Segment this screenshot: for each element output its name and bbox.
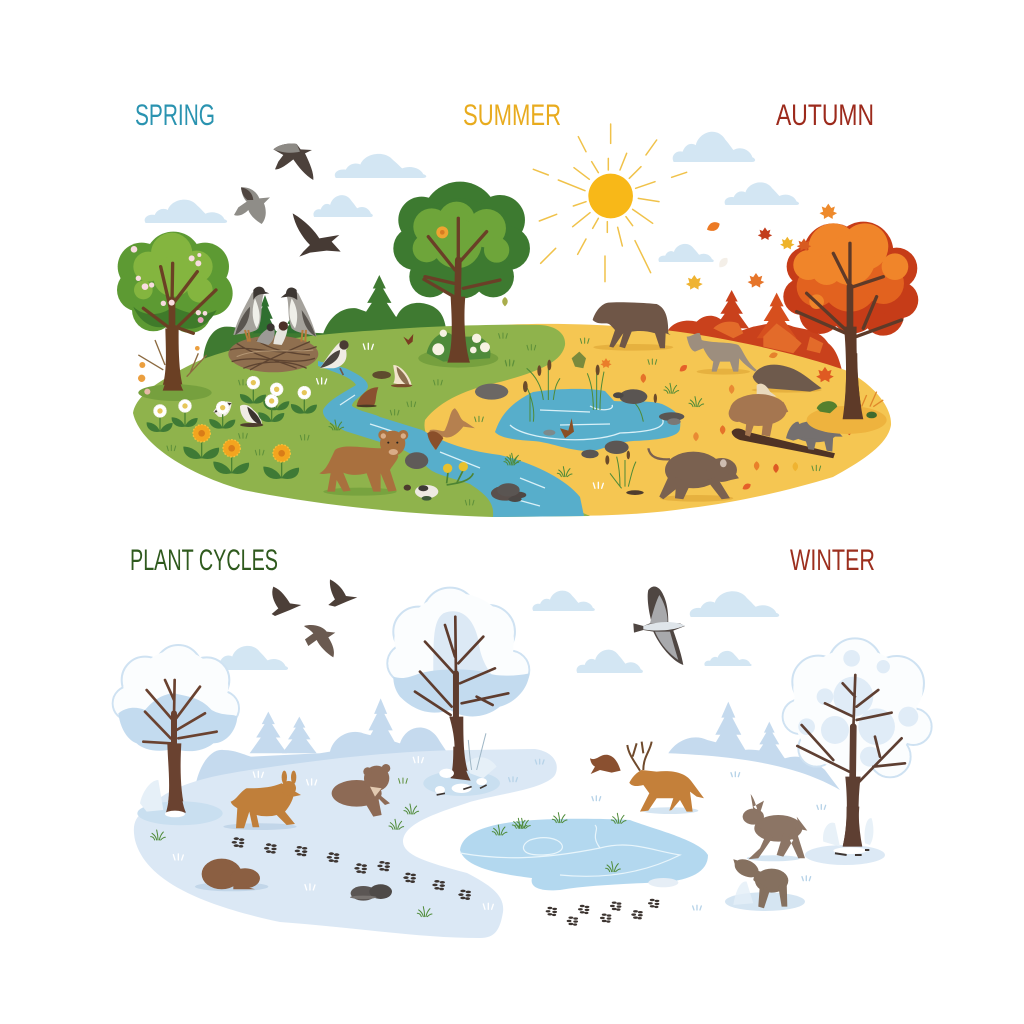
falling leaves — [600, 204, 852, 491]
bottom boar — [648, 448, 739, 502]
winter mid tree inner fill — [388, 593, 528, 707]
dog — [319, 430, 408, 496]
autumn tree trunk — [797, 243, 902, 419]
summer tree canopy — [393, 182, 530, 298]
winter mid tree snow base — [423, 747, 500, 796]
title: Plant cycles: PLANT CYCLES — [130, 544, 278, 577]
panel: spring scene — [117, 144, 530, 505]
groundhog — [195, 859, 268, 891]
summer tree trunk — [424, 218, 500, 363]
winter birds trio — [272, 579, 357, 657]
boar top — [593, 302, 673, 351]
tufts winter right — [509, 759, 826, 910]
river ripples — [340, 395, 545, 506]
rocks winter — [350, 884, 392, 901]
adult bird right — [281, 288, 317, 342]
panel: summer and autumn scene — [497, 124, 918, 502]
perched bird pair — [372, 365, 412, 387]
spring tree blossoms — [131, 246, 207, 323]
cattails and reeds — [525, 365, 643, 488]
summer tree light foliage — [413, 202, 509, 268]
winter tree left blue shading — [118, 693, 237, 751]
small fox — [590, 755, 621, 774]
winter right tree trunk — [797, 675, 905, 847]
winter tree left trunk — [143, 680, 217, 813]
grey deer — [743, 794, 807, 861]
title: Spring: SPRING — [135, 99, 215, 132]
winter tree left canopy outline — [113, 645, 239, 726]
mushrooms and bush by autumn tree — [807, 392, 887, 434]
winter mid tree trunk — [415, 617, 508, 780]
rocks and stones by river — [404, 384, 526, 501]
winter right tree inner fill — [784, 648, 931, 776]
spring tree light foliage — [133, 233, 213, 303]
summer tree flower and leaf — [436, 226, 508, 306]
winter right tree snow base — [805, 807, 885, 865]
autumn tree bright foliage — [793, 223, 908, 309]
butterfly on pond — [560, 418, 574, 438]
butterfly on bank — [572, 352, 586, 368]
autumn tree mid foliage — [797, 255, 904, 312]
panel: autumn forest hills — [667, 290, 845, 383]
winter mid tree blue shading — [393, 669, 529, 716]
pond — [495, 389, 680, 451]
spring tree dark lower foliage — [133, 307, 217, 329]
snow mound by pond — [648, 878, 678, 887]
panel: winter scene right — [509, 586, 932, 926]
nest — [228, 336, 318, 372]
adult bird left — [233, 287, 269, 342]
clouds: lower sky — [211, 591, 779, 673]
bird: top — [273, 144, 313, 180]
panel: spring forest hills — [203, 275, 447, 367]
winter tree left snow mound — [137, 767, 223, 825]
pond ripples — [510, 405, 663, 440]
standing bird by river — [320, 340, 349, 375]
mole — [752, 365, 822, 393]
cattail heads — [523, 360, 657, 465]
wolf — [725, 856, 805, 911]
spring small orange blooms — [138, 346, 200, 395]
grass clumps — [505, 338, 821, 488]
grass winter left — [151, 757, 493, 909]
spring tree base shadow — [138, 360, 212, 401]
grass sprigs — [389, 804, 530, 917]
paw prints below pond — [546, 899, 659, 926]
yellow flowers by river — [443, 462, 473, 485]
panel: winter hills left — [195, 698, 450, 788]
chicks — [257, 321, 288, 345]
bird: grey — [234, 187, 270, 224]
fallen log — [732, 428, 835, 458]
duck-like animal on bank — [427, 408, 475, 450]
winter mid tree pale centre — [433, 611, 497, 680]
butterfly — [403, 334, 413, 345]
spring tree canopy — [117, 232, 233, 333]
reindeer — [627, 742, 704, 814]
capybara — [729, 394, 788, 437]
river — [318, 361, 584, 517]
title: Winter: WINTER — [790, 544, 875, 577]
small pale bird on capybara — [757, 384, 777, 397]
donkey — [687, 333, 757, 375]
small birds near flowers — [213, 402, 263, 427]
gull in flight — [633, 586, 685, 665]
winter right tree canopy outline — [783, 638, 932, 777]
winter tree left inner fill — [114, 650, 238, 737]
reeds behind mid tree — [468, 733, 486, 770]
orange flowers — [183, 425, 299, 479]
winter pond — [460, 819, 708, 890]
trunk base — [843, 353, 863, 419]
paw prints trail — [232, 837, 471, 900]
spring bush twigs — [138, 340, 207, 377]
background pines by nest — [253, 295, 303, 333]
flower bush under summer tree — [418, 330, 498, 368]
ground: autumn and summer yellow field — [400, 324, 891, 516]
winter pond ice lines — [460, 825, 680, 876]
brown perched bird — [357, 387, 378, 407]
bear — [332, 764, 390, 817]
grey anteater — [786, 421, 843, 452]
ground: spring green meadow — [133, 325, 590, 517]
sun — [533, 124, 687, 282]
rocks around pond — [497, 389, 684, 502]
winter right tree blue patches — [798, 650, 918, 767]
title: Autumn: AUTUMN — [776, 99, 874, 132]
white and grass tufts on meadow — [167, 333, 519, 505]
spring tree trunk — [143, 263, 216, 391]
daisies — [147, 376, 317, 432]
autumn tree canopy — [783, 222, 918, 336]
deer — [223, 771, 301, 830]
panel: winter scene left — [113, 579, 530, 917]
panel: winter hills right — [668, 702, 840, 790]
bird: dark — [293, 213, 341, 257]
title: Summer: SUMMER — [463, 99, 561, 132]
winter mid tree canopy outline — [387, 588, 529, 689]
clouds: upper sky — [145, 132, 799, 262]
ground: winter snowfield — [134, 749, 557, 938]
